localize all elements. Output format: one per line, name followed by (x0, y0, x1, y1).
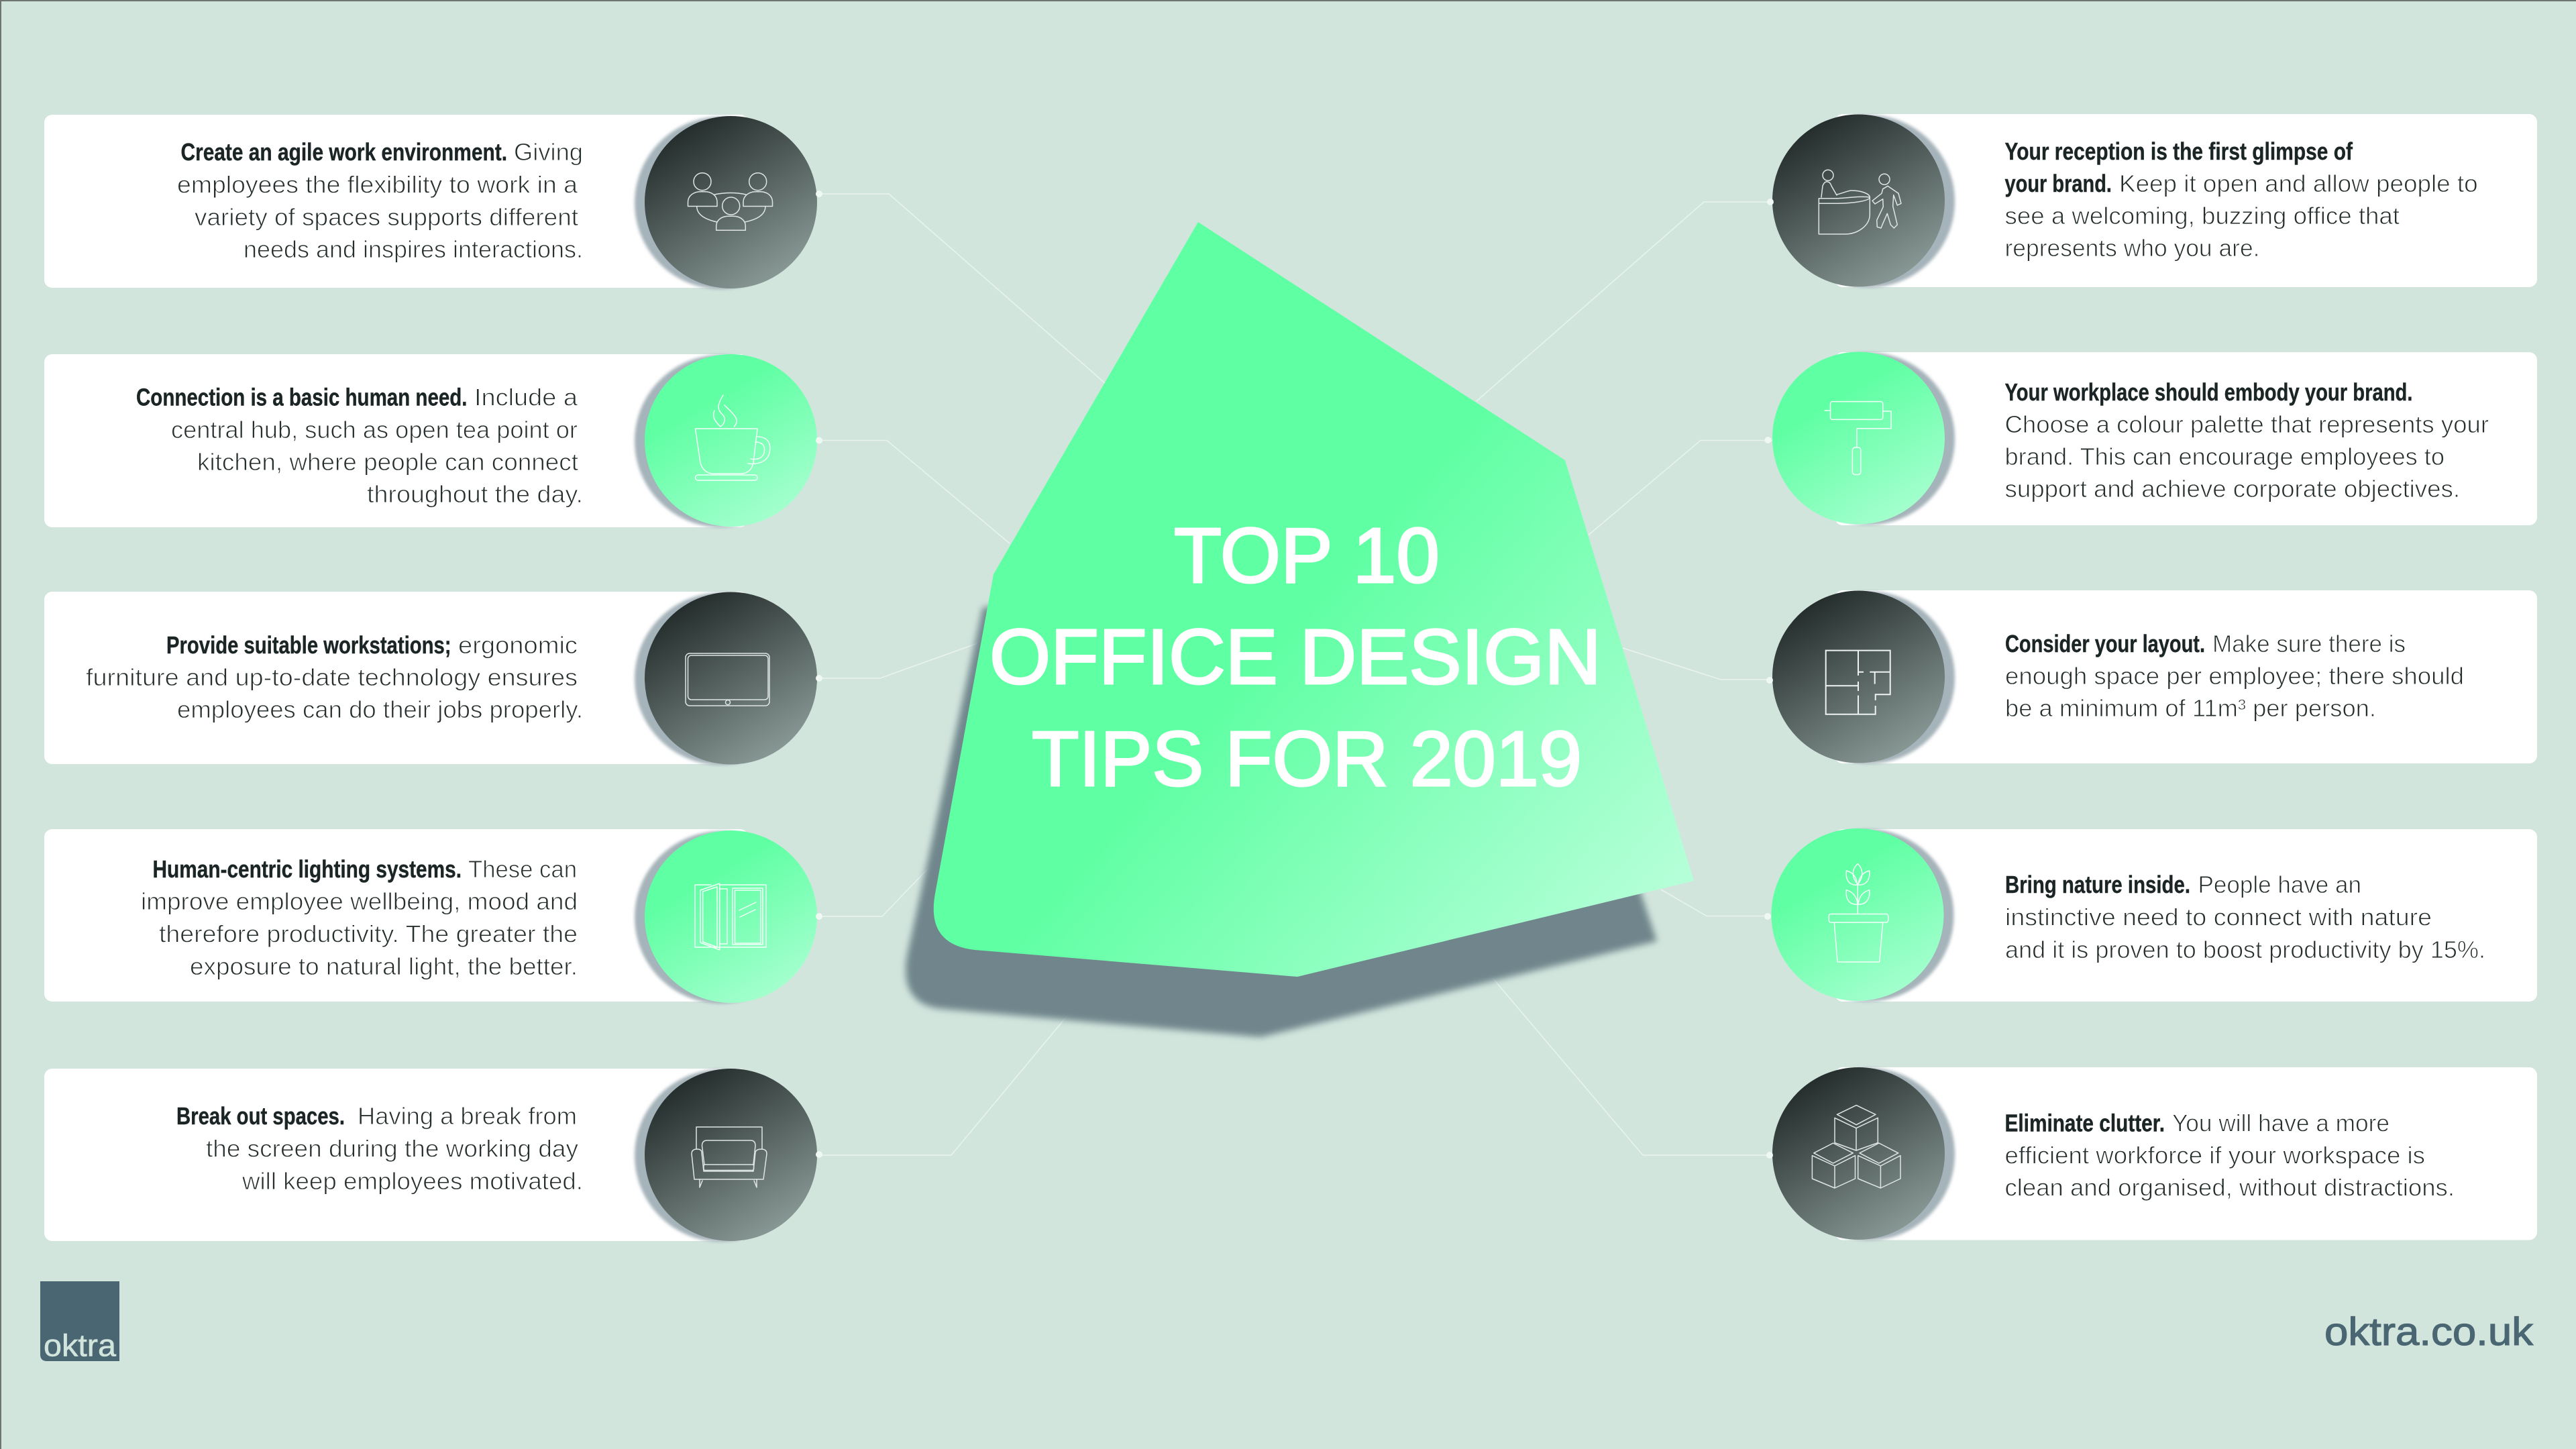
text: workstations: furniture and up-to-date technology ensures (86, 663, 578, 691)
text: workstations: ergonomic (458, 631, 578, 659)
text: break out spaces: will keep employees motivated. (241, 1167, 583, 1195)
text: clutter: You will have a more (2172, 1110, 2390, 1136)
card (1835, 829, 2537, 1002)
panel: connection (44, 354, 822, 527)
panel: reception (1767, 114, 2537, 287)
text: layout: enough space per employee; there should (2005, 662, 2464, 690)
icon: meeting people (688, 173, 773, 230)
central shape shadow (906, 604, 1657, 1037)
panel: clutter (1766, 1067, 2537, 1240)
text: clutter: efficient workforce if your workspace is (2004, 1142, 2425, 1169)
text: agile work environment: variety of spaces supports different (195, 203, 578, 231)
badge (1771, 828, 1944, 1001)
connector lines (816, 194, 1772, 1155)
text: agile work environment: needs and inspires interactions. (244, 235, 583, 263)
text: lighting (141, 855, 578, 980)
panel: workstations (44, 592, 822, 765)
badge (645, 830, 817, 1003)
text: brand: Choose a colour palette that represents your (2004, 411, 2489, 438)
panel: nature (1764, 828, 2537, 1002)
logo (40, 1281, 119, 1363)
text: brand (2004, 378, 2489, 502)
text: agile work environment: Giving (514, 138, 583, 166)
text: brand: Your workplace should embody your brand. (2004, 378, 2412, 406)
text: nature: People have an (2198, 871, 2361, 898)
card (1835, 590, 2537, 763)
title: TIPS FOR 2019 (1032, 715, 1582, 802)
text: layout: Consider your layout. (2005, 630, 2205, 657)
text: agile work environment: Create an agile work environment. (181, 138, 507, 166)
text: clutter: Eliminate clutter. (2004, 1110, 2165, 1136)
text: connection: throughout the day. (367, 480, 583, 508)
text: break out spaces: Break out spaces. (176, 1102, 345, 1130)
text: lighting: Human-centric lighting systems. (153, 855, 462, 883)
text: break out spaces: the screen during the working day (206, 1135, 578, 1162)
icon: potted plant (1829, 864, 1888, 962)
panel: brand (1764, 352, 2537, 525)
text: nature: Bring nature inside. (2005, 871, 2190, 898)
panel: agile work environment (44, 115, 822, 289)
icon: stacked boxes (1812, 1106, 1900, 1188)
card (1835, 1067, 2537, 1240)
text: workstations (86, 631, 583, 723)
badge (1772, 1067, 1945, 1240)
text: connection: central hub, such as open tea point or (171, 416, 578, 443)
text: break out spaces: Having a break from (358, 1102, 577, 1130)
panel: layout (1766, 590, 2537, 763)
text: reception: represents who you are. (2004, 234, 2259, 262)
text: clutter: clean and organised, without distractions. (2004, 1174, 2455, 1201)
text: nature: instinctive need to connect with nature (2005, 903, 2432, 931)
icon: window (695, 883, 766, 950)
text: agile work environment: employees the flexibility to work in a (177, 170, 578, 199)
text: nature (2005, 871, 2485, 963)
text: brand: brand. This can encourage employees to (2004, 443, 2445, 470)
badge (1772, 590, 1945, 763)
text: lighting: These can (468, 855, 577, 883)
text: lighting: exposure to natural light, the better. (190, 953, 578, 980)
text: break out spaces (176, 1102, 583, 1195)
text: reception: see a welcoming, buzzing office that (2004, 202, 2400, 229)
badge (645, 592, 817, 765)
card (1835, 352, 2537, 525)
icon: paint roller (1825, 402, 1891, 475)
text: connection: Include a (474, 384, 578, 411)
text: reception: your brand. (2004, 170, 2112, 197)
text: lighting: therefore productivity. The greater the (159, 920, 578, 947)
title: OFFICE DESIGN (989, 613, 1601, 700)
title: TOP 10 (1174, 512, 1440, 599)
badge (645, 1069, 817, 1241)
logo: oktra (44, 1328, 116, 1363)
text: connection: Connection is a basic human need. (136, 384, 467, 411)
panel: break out spaces (44, 1069, 822, 1242)
icon: coffee cup (695, 395, 770, 480)
text: reception (2004, 138, 2478, 262)
website url: oktra.co.uk (2324, 1310, 2534, 1354)
card (44, 354, 748, 527)
icon: floor plan (1826, 651, 1890, 714)
icon: reception desk (1819, 170, 1901, 234)
text: layout: Make sure there is (2212, 630, 2406, 657)
text: connection: kitchen, where people can connect (197, 448, 578, 476)
badge (1772, 352, 1945, 525)
card (1835, 114, 2537, 287)
title (989, 512, 1601, 802)
card (44, 115, 748, 288)
badge (1772, 114, 1945, 287)
central shape (934, 222, 1694, 977)
text: clutter (2004, 1110, 2455, 1201)
icon: tablet (686, 653, 769, 706)
text: workstations: employees can do their jobs properly. (177, 696, 583, 723)
text: layout: be a minimum of 11m³ per person. (2005, 694, 2376, 722)
text: connection (136, 384, 583, 508)
card (44, 829, 748, 1002)
text: reception: Your reception is the first glimpse of (2004, 138, 2353, 165)
text: agile work environment (177, 138, 583, 263)
text: nature: and it is proven to boost productivity by 15%. (2005, 936, 2485, 963)
badge (645, 354, 817, 527)
card (44, 592, 748, 764)
text: workstations: Provide suitable workstations; (166, 631, 451, 659)
text: lighting: improve employee wellbeing, mood and (141, 888, 578, 915)
text: reception: Keep it open and allow people to (2119, 170, 2478, 197)
panel: lighting (44, 829, 822, 1004)
icon: armchair (692, 1127, 767, 1187)
badge (645, 116, 817, 288)
text: brand: support and achieve corporate objectives. (2004, 475, 2460, 502)
text: layout (2005, 630, 2464, 722)
card (44, 1069, 748, 1241)
